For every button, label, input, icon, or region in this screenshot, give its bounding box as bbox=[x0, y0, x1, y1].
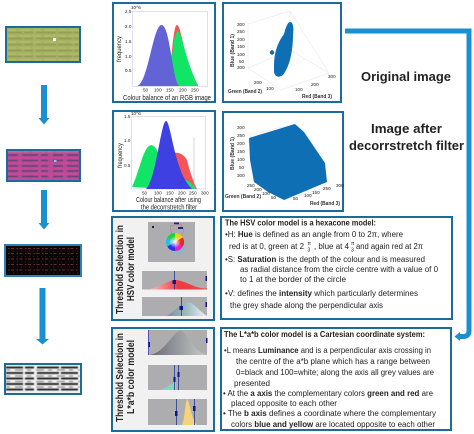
bullet: saturation: as radial distance from the circle centre with a value of 0 bbox=[240, 265, 439, 274]
bullet: a axis: • At the a axis the complementary colors green and red are bbox=[223, 389, 434, 398]
axis tick labels: 50 bbox=[143, 88, 149, 92]
axis tick labels: 1.0 bbox=[124, 138, 131, 143]
bullet: value bbox=[225, 289, 418, 310]
panel: decorrstretch 3D scatter: 50 bbox=[239, 165, 245, 170]
panel: RGB 3D scatter: 200 bbox=[254, 80, 262, 85]
bullet: b axis: • The b axis defines a coordinate where the complementary bbox=[223, 409, 436, 418]
value histogram bbox=[142, 297, 207, 316]
label: image after decorrstretch filter: Image after bbox=[371, 122, 442, 136]
caption: Colour balance after using bbox=[136, 197, 201, 204]
axis tick labels: 250 bbox=[191, 88, 199, 92]
label: image after decorrstretch filter: decorrstretch filter bbox=[349, 139, 464, 153]
bullet: luminance: presented bbox=[234, 379, 270, 388]
label: image after decorrstretch filter bbox=[349, 122, 464, 153]
panel: RGB histogram bbox=[113, 3, 215, 102]
axis tick labels: 200 bbox=[178, 190, 186, 196]
bullet: hue: •H: Hue is defined as an angle from 0 to 2π, where bbox=[225, 230, 404, 239]
arrow: decorrelated image to HSV mask bbox=[38, 190, 50, 230]
bullet: hue bbox=[225, 230, 423, 254]
panel: decorrstretch 3D scatter: 300 bbox=[237, 173, 245, 178]
panel: decorrstretch 3D scatter: 200 bbox=[237, 141, 245, 146]
bullet: b axis bbox=[223, 409, 436, 429]
panel: decorrstretch 3D scatter: 250 bbox=[237, 133, 245, 138]
bullet: a axis bbox=[223, 389, 434, 408]
heading: The HSV color model is a hexacone model: bbox=[225, 218, 376, 228]
panel: RGB 3D scatter: 250 bbox=[237, 29, 245, 34]
bullet: luminance bbox=[224, 346, 435, 388]
panel: RGB 3D scatter: Green (Band 2) bbox=[228, 89, 262, 95]
panel: RGB 3D scatter: 100 bbox=[295, 87, 303, 92]
panel: decorrstretch 3D scatter: 150 bbox=[237, 149, 245, 154]
caption bbox=[136, 197, 201, 212]
y axis label: frequency bbox=[117, 36, 123, 62]
panel: decorrstretch 3D scatter: 250 bbox=[247, 183, 255, 188]
L histogram bbox=[148, 330, 208, 355]
axis tick labels: 2.0 bbox=[125, 24, 132, 29]
histogram: blue channel bbox=[146, 121, 192, 189]
panel: decorrstretch 3D scatter: 300 bbox=[336, 183, 344, 188]
panel: decorrstretch 3D scatter: 50 bbox=[293, 196, 299, 201]
panel: decorrstretch 3D scatter: 100 bbox=[304, 193, 312, 198]
caption: the decorrstretch filter bbox=[141, 204, 198, 212]
scatter cloud bbox=[274, 22, 293, 77]
axis tick labels: 10^6 bbox=[131, 111, 141, 116]
bullet: hue: red is at 0, green at 2 bbox=[229, 242, 305, 251]
panel: RGB 3D scatter: Red (Band 3) bbox=[302, 94, 332, 100]
vertical heading: Threshold Selection in bbox=[115, 333, 126, 422]
axis labels: Blue (Band 1) bbox=[230, 137, 236, 170]
image: original field photo bbox=[6, 27, 80, 62]
panel: RGB 3D scatter: 200 bbox=[237, 37, 245, 42]
histogram: red channel bbox=[168, 25, 198, 86]
bullet: luminance: •L means Luminance and is a perpendicular axis crossing in bbox=[224, 346, 431, 355]
hue histogram bbox=[142, 271, 207, 290]
panel: decorrstretch 3D scatter: Red (Band 3) bbox=[310, 201, 340, 207]
panel: Lab explanation bbox=[221, 328, 451, 430]
axis tick labels: 50 bbox=[142, 190, 148, 196]
bullet: hue: π bbox=[308, 241, 312, 247]
axis tick labels: 2.5 bbox=[125, 9, 132, 14]
label: original image: Original image bbox=[361, 70, 451, 84]
bullet: value: •V: defines the intensity which particularly determines bbox=[225, 289, 418, 298]
panel: decorrstretch 3D scatter: 100 bbox=[237, 157, 245, 162]
axis tick labels bbox=[125, 5, 199, 92]
arrow: HSV mask to binary mask bbox=[36, 288, 49, 344]
arrow: photo to decorrelated image bbox=[38, 85, 50, 124]
a histogram bbox=[148, 365, 207, 390]
panel: RGB 3D scatter: 300 bbox=[237, 22, 245, 27]
axis tick labels: 1.5 bbox=[124, 114, 131, 119]
bullet: hue: 3 bbox=[351, 248, 354, 254]
panel: decorrstretch histogram bbox=[113, 111, 215, 212]
vertical heading: Threshold Selection in bbox=[115, 225, 126, 314]
bullet: luminance: the centre of the a*b plane which has a range between bbox=[236, 357, 430, 366]
b histogram bbox=[148, 399, 207, 425]
vertical heading bbox=[115, 225, 137, 314]
axis tick labels: 0.5 bbox=[124, 163, 131, 168]
scatter cloud bbox=[249, 124, 327, 200]
panel: threshold selection in HSV bbox=[112, 217, 214, 320]
histogram: green channel bbox=[132, 145, 196, 189]
axis tick labels: 100 bbox=[154, 88, 162, 92]
panel: RGB 3D scatter: 100 bbox=[266, 86, 274, 91]
y axis label: frequency bbox=[118, 143, 124, 168]
panel: decorrstretch 3D scatter bbox=[223, 112, 344, 211]
axis tick labels: 300 bbox=[201, 190, 209, 196]
bullet: a axis: placed opposite to each other bbox=[231, 399, 337, 408]
panel: threshold selection in Lab bbox=[112, 328, 214, 431]
panel: decorrstretch 3D scatter: 100 bbox=[262, 191, 270, 196]
axis tick labels: 150 bbox=[166, 88, 174, 92]
bullet: hue: , blue at 4 bbox=[314, 242, 350, 251]
vertical heading: L*a*b color model bbox=[126, 340, 137, 414]
bullet: saturation bbox=[225, 255, 439, 284]
image: threshold red mask bbox=[5, 245, 81, 276]
image: decorrelated field photo bbox=[7, 150, 80, 181]
bullet: hue: 3 bbox=[308, 248, 310, 254]
image: binary mask bbox=[5, 364, 81, 394]
axis tick labels: 250 bbox=[189, 190, 197, 196]
bullet: hue: π bbox=[351, 241, 355, 247]
panel: decorrstretch 3D scatter: 150 bbox=[312, 190, 320, 195]
caption: Colour balance of an RGB image bbox=[123, 95, 211, 102]
panel: RGB 3D scatter: 300 bbox=[237, 65, 245, 70]
axis tick labels: 1.0 bbox=[125, 54, 132, 59]
bullet: saturation: to 1 at the border of the circle bbox=[240, 275, 347, 284]
axis tick labels: 150 bbox=[166, 190, 174, 196]
axis tick labels: 1.5 bbox=[125, 39, 132, 44]
bullet: value: the grey shade along the perpendicular axis bbox=[230, 301, 383, 310]
heading: The L*a*b color model is a Cartesian coordinate system: bbox=[224, 330, 425, 339]
panel: RGB 3D scatter: 300 bbox=[328, 74, 336, 79]
panel: RGB 3D scatter: 200 bbox=[311, 82, 319, 87]
panel: decorrstretch 3D scatter: 250 bbox=[323, 186, 331, 191]
histogram: red channel bbox=[170, 153, 197, 189]
panel: RGB 3D scatter bbox=[223, 3, 341, 102]
axis tick labels: 10^6 bbox=[131, 5, 141, 10]
histogram: green channel bbox=[169, 31, 198, 86]
vertical heading bbox=[115, 333, 137, 422]
histogram: blue channel bbox=[137, 25, 179, 86]
panel: decorrstretch 3D scatter: 300 bbox=[237, 125, 245, 130]
bullet: luminance: 0=black and 100=white; along the axis all grey values are bbox=[236, 368, 435, 377]
panel: RGB 3D scatter: 50 bbox=[239, 59, 245, 64]
bullet: saturation: •S: Saturation is the depth of the colour and is measured bbox=[225, 255, 425, 264]
axis tick labels bbox=[124, 111, 209, 196]
panel: decorrstretch 3D scatter: 200 bbox=[254, 187, 262, 192]
panel: RGB 3D scatter: 100 bbox=[237, 52, 245, 57]
colour wheel plot bbox=[148, 222, 195, 262]
panel: RGB 3D scatter: 150 bbox=[237, 44, 245, 49]
panel: decorrstretch 3D scatter: 50 bbox=[271, 195, 277, 200]
panel: HSV explanation bbox=[221, 217, 452, 319]
panel: decorrstretch 3D scatter: Green (Band 2) bbox=[225, 194, 261, 200]
bullet: hue: and again red at 2π bbox=[356, 242, 423, 251]
connector: blue arrow to L*a*b panel bbox=[345, 31, 469, 336]
axis tick labels: 100 bbox=[154, 190, 162, 196]
bullet: b axis: colors blue and yellow are located opposite to each other bbox=[231, 420, 435, 429]
vertical heading: HSV color model bbox=[126, 237, 137, 301]
axis tick labels: 0.5 bbox=[125, 68, 132, 73]
axis labels: Blue (Band 1) bbox=[230, 34, 236, 67]
axis tick labels: 200 bbox=[179, 88, 187, 92]
